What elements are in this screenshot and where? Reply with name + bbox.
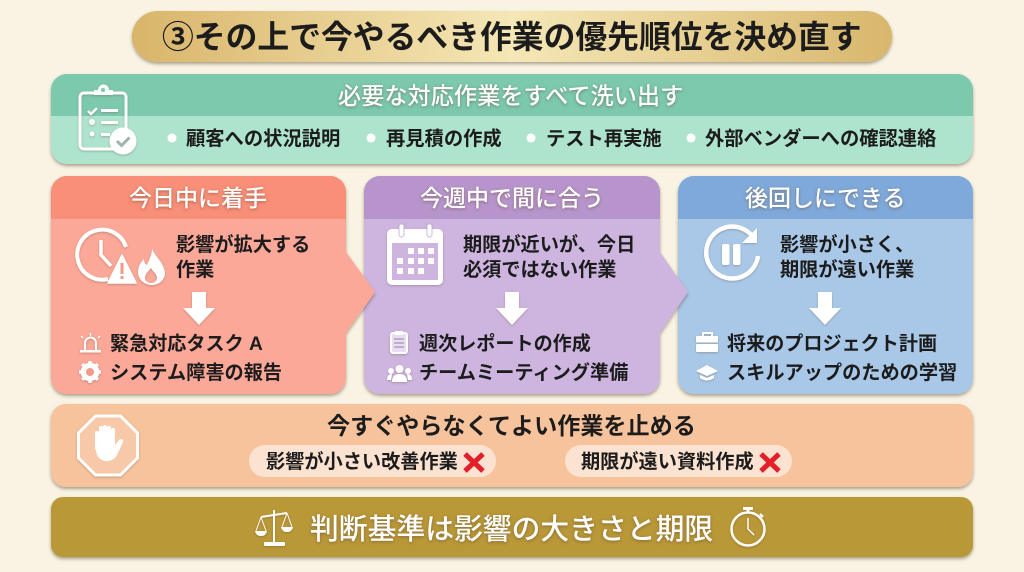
task: system failure report: システム障害の報告 [110,362,282,384]
task list: 外部ベンダーへの確認連絡 [705,127,937,150]
description: 影響が小さく、 [780,233,914,256]
heading: stop tasks: 今すぐやらなくてよい作業を止める [327,413,696,439]
description: 影響が拡大する [176,233,310,256]
panel: in time this week [364,176,688,394]
heading: start today: 今日中に着手 [129,185,267,211]
icon: stop hand [78,416,138,475]
panel: can be postponed [678,176,973,394]
banner: decision criteria [51,497,973,557]
task: urgent task A: 緊急対応タスク A [110,332,263,355]
tag: far-deadline document: 期限が遠い資料作成 [581,450,754,473]
icon: graduation cap [696,365,718,380]
task list [168,127,937,150]
tag: low impact improvement [249,445,496,477]
title [132,11,892,62]
task list: テスト再実施 [546,128,662,150]
icon: calendar [387,224,443,285]
panel: start today [51,176,375,394]
description: 期限が遠い作業 [780,258,914,281]
description: 期限が近いが、今日 [463,233,635,256]
icon: clock with warning and flame [77,230,165,285]
heading: can be postponed: 後回しにできる [745,185,906,211]
description: 必須ではない作業 [463,259,616,281]
panel: stop tasks [51,404,973,487]
description [176,233,310,281]
icon: stopwatch [732,507,764,546]
description: 作業 [176,259,214,281]
icon: clipboard checklist [80,84,136,154]
task: skill learning: スキルアップのための学習 [727,361,957,384]
task: project plan: 将来のプロジェクト計画 [727,332,937,355]
description [463,233,635,281]
tag: far-deadline document [565,445,792,477]
icon: pause with circular arrow [706,227,758,279]
heading: in time this week: 今週中で間に合う [420,185,604,211]
task list: 再見積の作成 [386,127,502,150]
icon: briefcase [696,333,718,352]
icon: siren [80,333,101,352]
icon: report [391,331,407,353]
arrow: down [496,292,528,325]
title: ③その上で今やるべき作業の優先順位を決め直す [162,19,862,55]
icon: scales [255,510,293,546]
icon: team [387,365,412,382]
arrow: down [809,292,841,325]
tag: low impact improvement: 影響が小さい改善作業 [266,450,458,473]
icon: gear [79,361,101,383]
panel: all required tasks [51,74,973,164]
criteria text: 判断基準は影響の大きさと期限 [310,514,713,546]
task: team meeting: チームミーティング準備 [419,361,628,384]
task: weekly report: 週次レポートの作成 [419,332,591,355]
arrow: down [183,292,215,325]
panel heading: all required tasks: 必要な対応作業をすべて洗い出す [338,83,683,109]
task list: 顧客への状況説明 [186,128,340,150]
description [780,233,914,281]
